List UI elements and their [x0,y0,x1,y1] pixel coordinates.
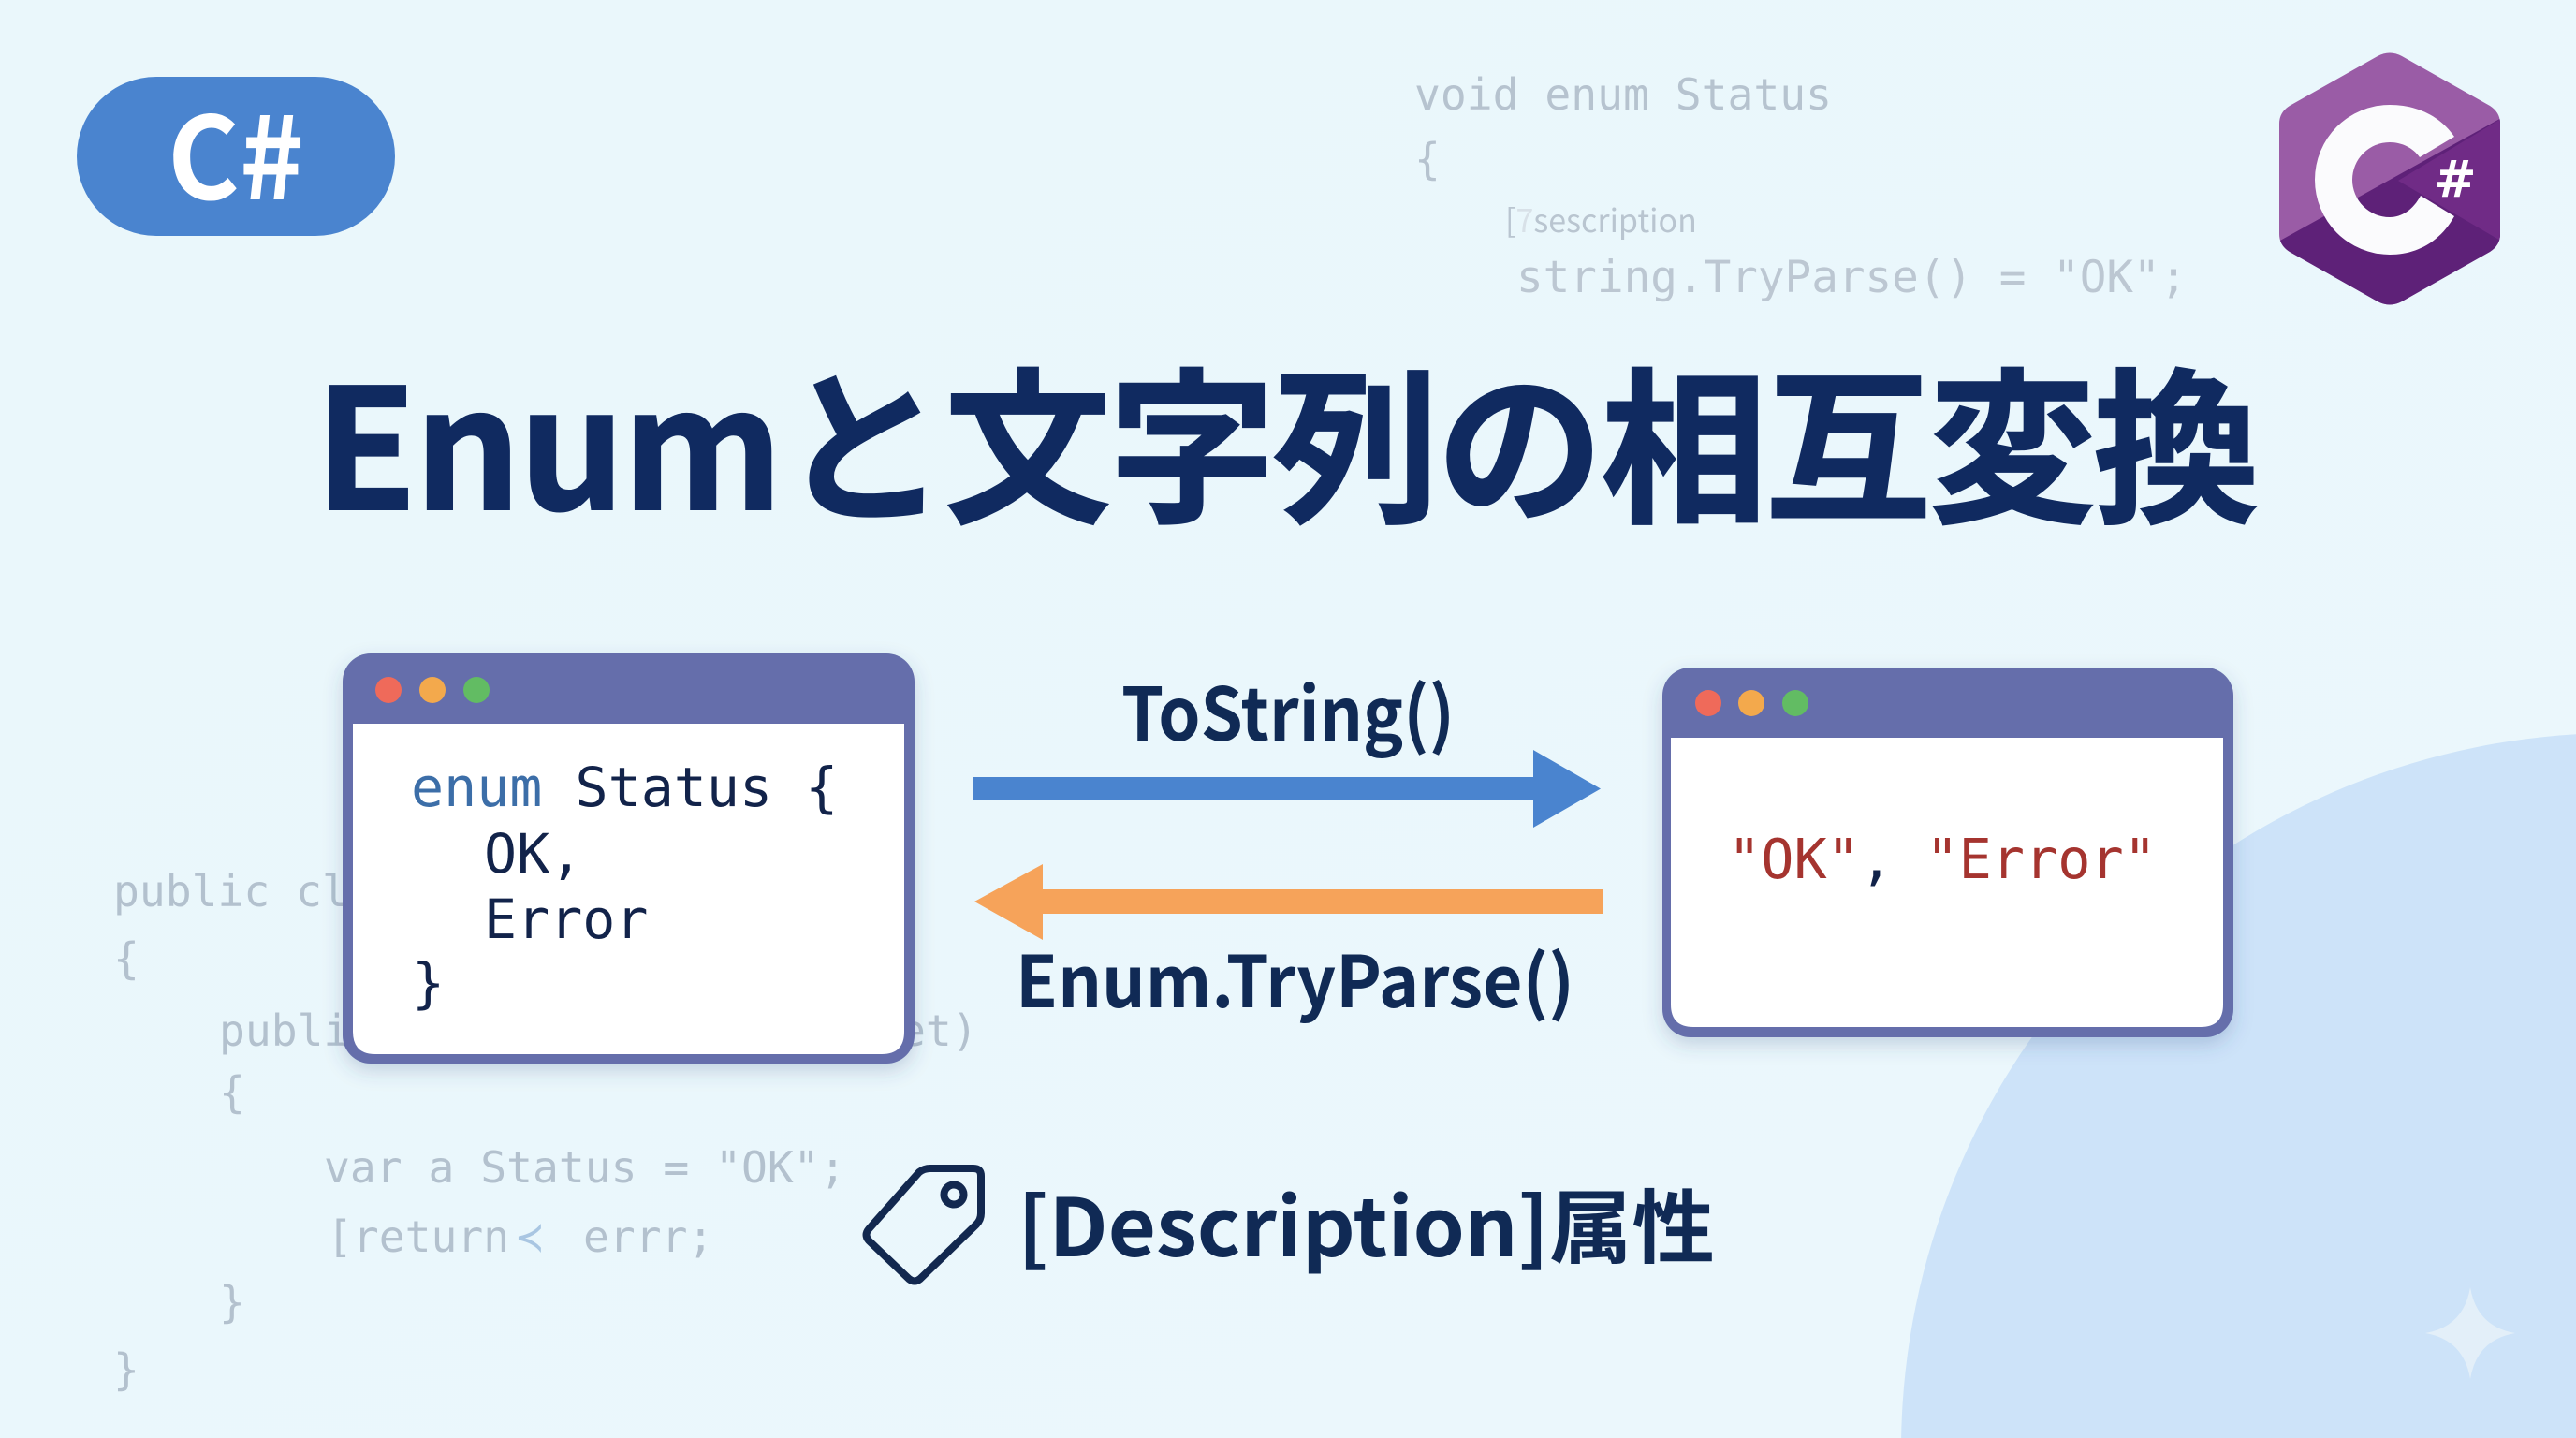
icon: tag [867,1168,981,1281]
background code: lower left: public cl [113,866,348,917]
background code: top right: [7sescription [1505,196,1697,242]
arrow: blue right [973,750,1601,828]
enum code text: enum Status { [411,756,838,819]
background code: lower left: publi [219,1005,349,1056]
arrow: orange left [974,864,1603,940]
C# badge [77,67,395,236]
label: ToString(): ToString() [1121,657,1455,762]
background code: lower left: } [219,1277,245,1328]
title: Enumと文字列の相互変換 [315,317,2257,558]
background code: lower left: { [113,933,139,984]
background code: lower left [113,866,978,1395]
window control dots [375,677,490,703]
enum code text: } [412,951,445,1015]
background code: top right: string.TryParse() = "OK"; [1516,252,2187,303]
panel: enum code window [343,653,915,1064]
enum code text: Error [484,888,648,951]
background code: lower left: var a Status = "OK"; [324,1142,845,1193]
background code: lower left: { [219,1067,245,1118]
background code: top right: void enum Status [1414,69,1832,120]
icon: C# logo: # [2434,150,2477,209]
window control dots [1695,690,1808,716]
decorative circle bottom right [1901,734,2576,1438]
background code: top right [1414,69,2187,303]
background code: lower left: } [113,1344,139,1395]
icon: sparkle [2425,1287,2515,1379]
string values text: "OK", "Error" [1728,828,2157,891]
background code: lower left: et) [900,1005,978,1056]
label: Description attribute: [Description]属性 [1017,1163,1715,1280]
background code: top right: { [1414,134,1441,184]
icon: C# logo [2279,52,2500,305]
background code: lower left: ≺ [517,1211,543,1262]
enum code text [411,756,838,1015]
enum code text: OK, [484,822,582,886]
label: Enum.TryParse(): Enum.TryParse() [1016,925,1574,1028]
C# badge: C# [168,67,304,233]
background code: lower left: errr; [583,1211,713,1262]
background code: lower left: [return [327,1211,509,1262]
panel: string values window [1662,668,2233,1037]
